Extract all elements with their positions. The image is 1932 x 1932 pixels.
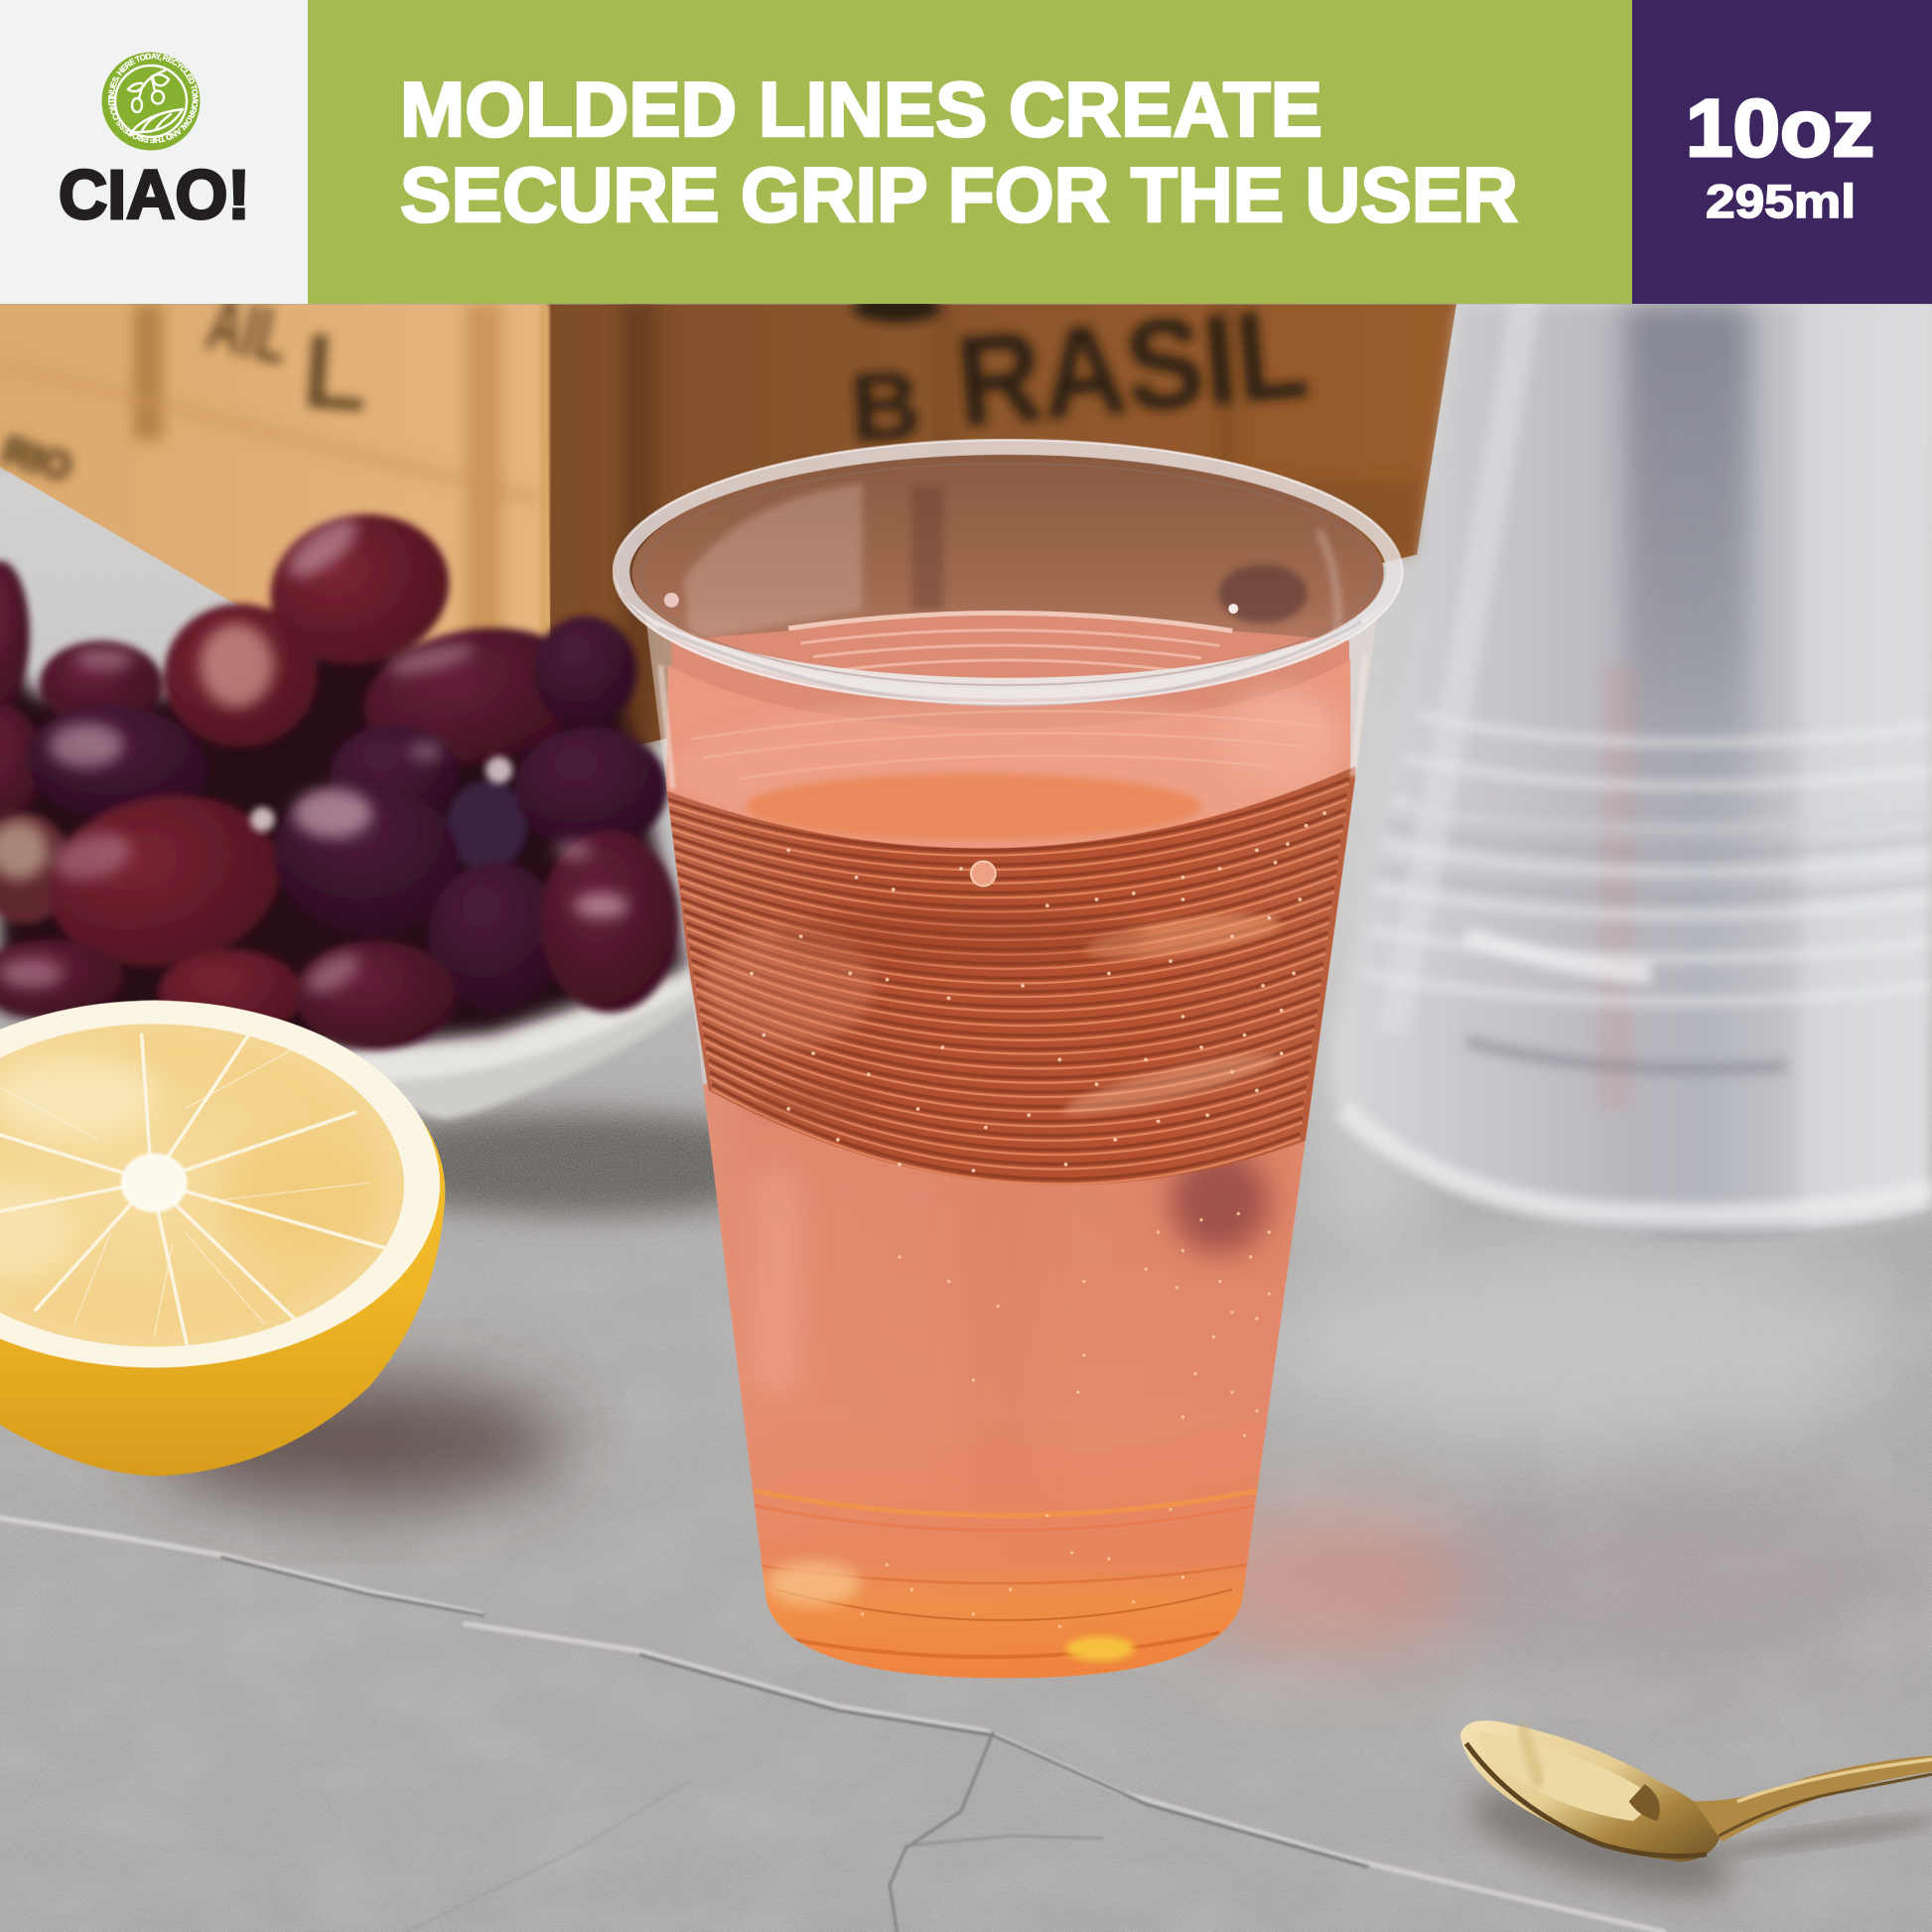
printed crate lettering: B — [848, 350, 923, 462]
lemon peel — [0, 1007, 445, 1476]
badge olive branch — [128, 70, 183, 134]
cup opening interior — [632, 455, 1384, 691]
wooden crate left — [0, 304, 551, 648]
lemon pith — [0, 1001, 440, 1368]
drink — [640, 659, 1392, 1688]
cup rim — [614, 440, 1402, 705]
badge circular text: HERE TODAY, RECYCLED TOMORROW. AND THE PROCESS CONTINUES. — [108, 54, 199, 143]
printed crate lettering — [847, 304, 1314, 447]
blurred stacked cups — [1332, 283, 1932, 1238]
grape highlights — [0, 509, 628, 1001]
main cup — [614, 440, 1402, 1688]
printed crate lettering left — [0, 304, 369, 486]
size panel — [1632, 0, 1932, 304]
liquid surface seen through opening — [671, 613, 1349, 740]
lemon core — [121, 1154, 188, 1212]
upper liquid — [665, 659, 1350, 888]
spoon bowl — [1460, 1721, 1723, 1862]
headline — [400, 66, 1518, 238]
spoon handle — [1694, 1756, 1932, 1842]
wooden crate right — [542, 281, 1456, 763]
halved lemon — [0, 1001, 445, 1476]
cup body glass — [645, 617, 1378, 1678]
molded grip ribs — [660, 766, 1355, 1185]
countertop cracks — [0, 1518, 1663, 1932]
gold spoon — [1460, 1721, 1932, 1915]
headline: SECURE GRIP FOR THE USER — [400, 151, 1518, 238]
lemon flesh — [0, 1024, 404, 1346]
rising bubbles — [752, 813, 1324, 1171]
plate of red grapes — [0, 498, 692, 1119]
lower liquid — [640, 1084, 1392, 1688]
lemon segment membranes — [0, 1029, 394, 1346]
big bubble — [971, 862, 996, 886]
size ml: 295ml — [1706, 175, 1856, 227]
printed crate lettering: RASIL — [951, 281, 1313, 454]
logo panel — [0, 0, 308, 304]
size oz: 10oz — [1686, 83, 1874, 174]
logo badge — [101, 52, 201, 151]
printed crate lettering left: L — [299, 311, 372, 434]
base of cup — [755, 1491, 1257, 1657]
lemon shadow — [148, 1380, 567, 1503]
headline: MOLDED LINES CREATE — [400, 66, 1322, 153]
headline panel — [308, 0, 1632, 304]
printed crate lettering left: AIL — [200, 280, 296, 380]
glass edge highlights — [660, 653, 1365, 788]
white plate — [333, 965, 692, 1119]
brand name: CIAO! — [59, 156, 250, 233]
grape cluster — [0, 498, 684, 1049]
pink cast of light from drink — [1176, 1509, 1472, 1657]
